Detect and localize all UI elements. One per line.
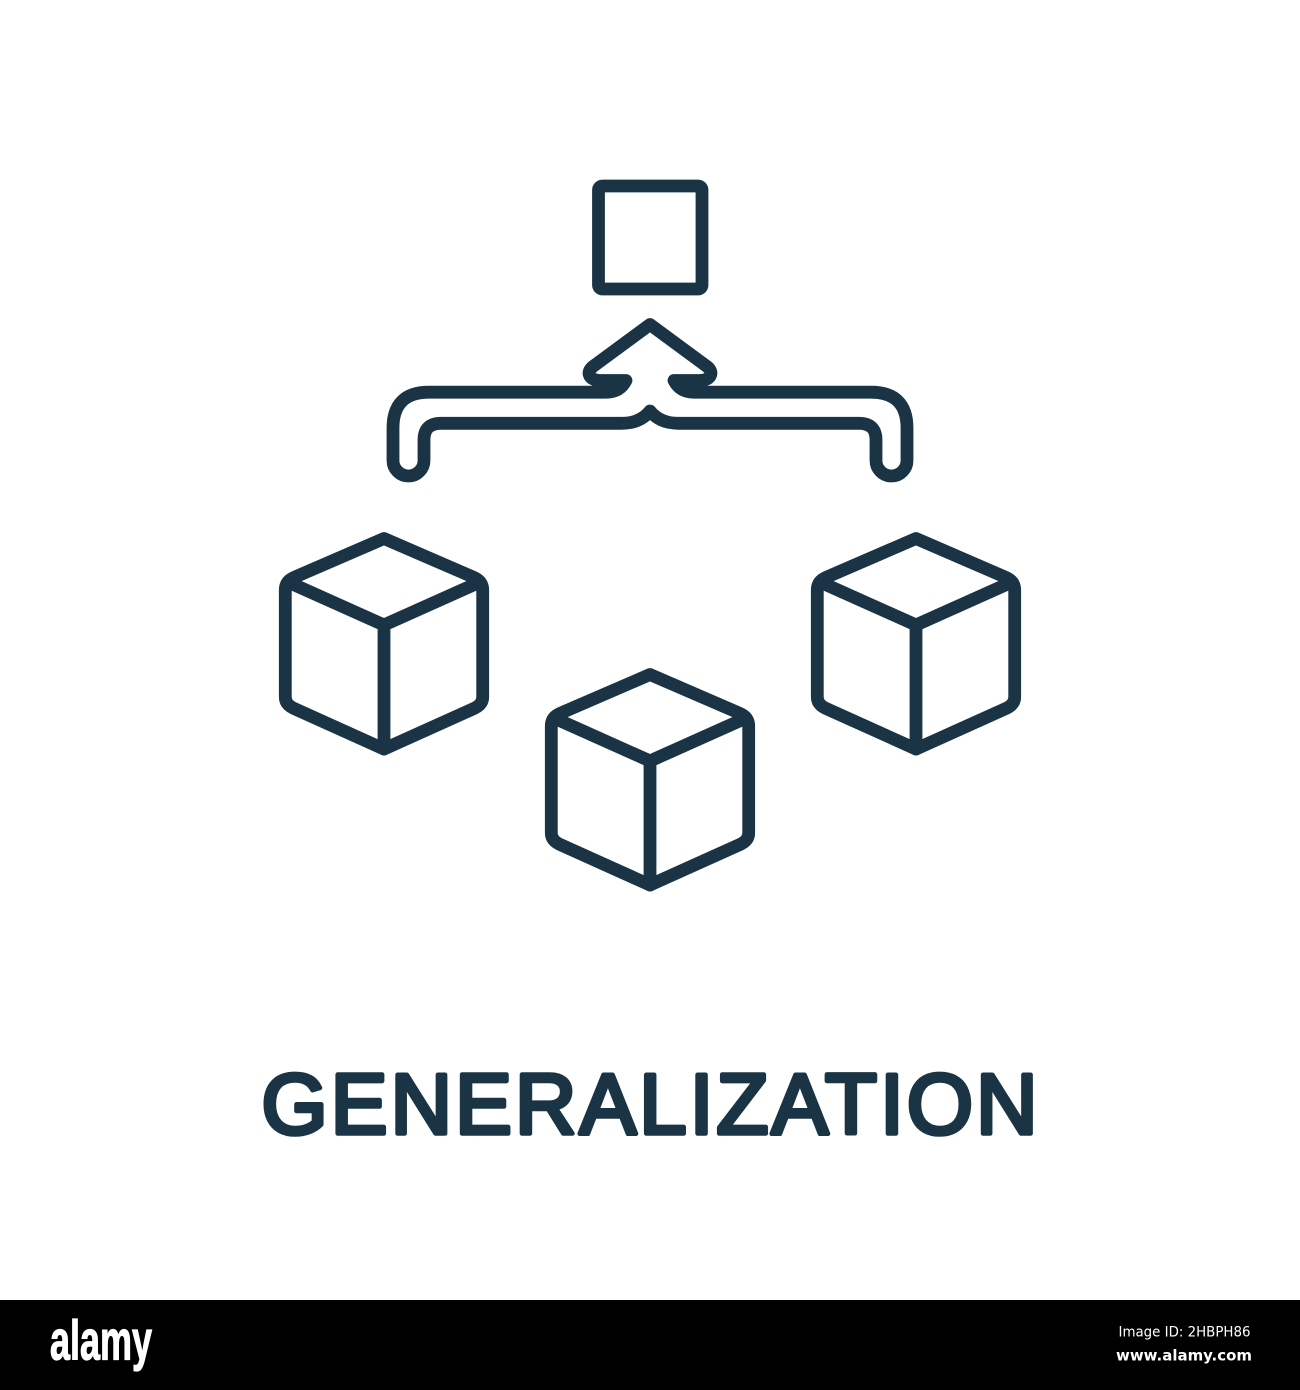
image id: Image ID: 2HBPH86 (1118, 1325, 1251, 1341)
icon: center cube (551, 674, 749, 885)
arrow: merging arrow pointing up (393, 324, 907, 476)
icon: generalization diagram (285, 186, 1015, 885)
icon: top square (598, 186, 702, 289)
logo: alamy: alamy (50, 1308, 152, 1372)
icon: left cube (285, 538, 483, 749)
title: GENERALIZATION (262, 1058, 1038, 1152)
website: www.alamy.com (1116, 1347, 1252, 1365)
icon: right cube (817, 538, 1015, 749)
footer band (0, 1300, 1300, 1390)
